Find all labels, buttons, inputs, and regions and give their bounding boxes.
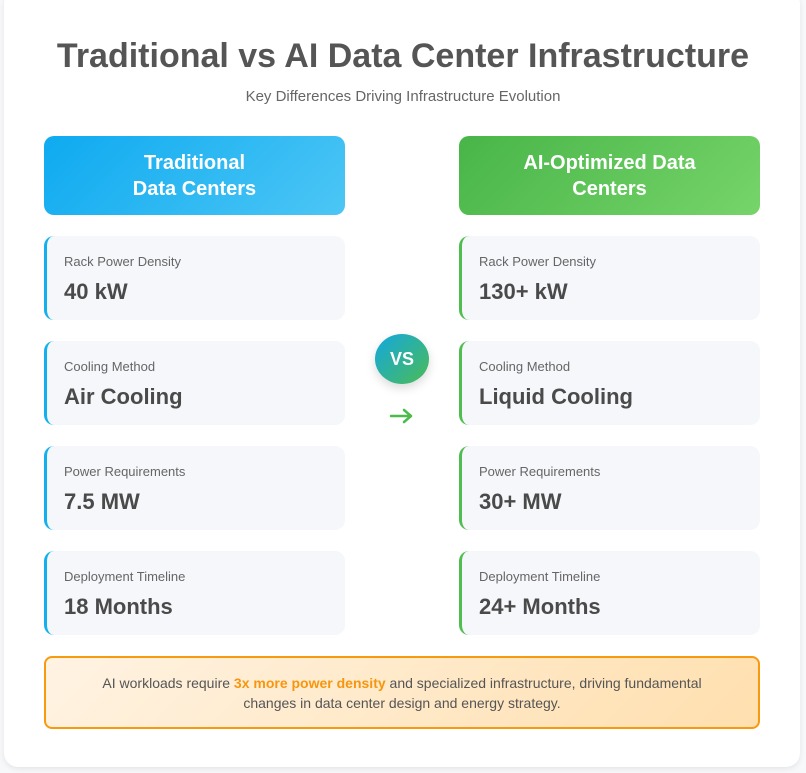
- VS badge: VS: [390, 348, 414, 368]
- metric: traditional cooling: Air Cooling: [64, 384, 183, 409]
- metric: AI cooling: Liquid Cooling: [479, 384, 633, 409]
- header: traditional: Traditional: [144, 152, 245, 174]
- metric: traditional cooling: [44, 341, 345, 425]
- metric: AI cooling: Cooling Method: [479, 359, 570, 374]
- metric: traditional power: Power Requirements: [64, 464, 185, 479]
- metric: traditional cooling: Cooling Method: [64, 359, 155, 374]
- title: Traditional vs AI Data Center Infrastructure: [57, 37, 749, 75]
- header: AI: AI-Optimized Data: [523, 152, 696, 174]
- arrow: [390, 408, 412, 424]
- header: AI: Centers: [572, 178, 647, 200]
- metric: AI timeline: [459, 551, 760, 635]
- metric: traditional power: [44, 446, 345, 530]
- metric: AI rack power: 130+ kW: [479, 279, 568, 304]
- header: AI: [459, 136, 760, 215]
- metric: traditional rack power: 40 kW: [64, 279, 128, 304]
- metric: AI rack power: [459, 236, 760, 320]
- metric: AI timeline: 24+ Months: [479, 594, 601, 619]
- metric: AI power: 30+ MW: [479, 489, 562, 514]
- metric: AI power: [459, 446, 760, 530]
- metric: traditional power: 7.5 MW: [64, 489, 140, 514]
- metric: traditional timeline: [44, 551, 345, 635]
- header: traditional: [44, 136, 345, 215]
- metric: traditional rack power: [44, 236, 345, 320]
- callout: changes in data center design and energy strategy.: [243, 695, 561, 711]
- callout: [44, 656, 760, 729]
- header: traditional: Data Centers: [133, 178, 256, 200]
- callout: AI workloads require 3x more power density and specialized infrastructure, driving fundamental: [102, 675, 702, 691]
- metric: AI cooling: [459, 341, 760, 425]
- metric: AI rack power: Rack Power Density: [479, 254, 596, 269]
- metric: traditional timeline: 18 Months: [64, 594, 173, 619]
- metric: AI power: Power Requirements: [479, 464, 600, 479]
- subtitle: Key Differences Driving Infrastructure Evolution: [246, 88, 560, 105]
- metric: traditional timeline: Deployment Timeline: [64, 569, 185, 584]
- VS badge: [375, 334, 429, 384]
- metric: traditional rack power: Rack Power Density: [64, 254, 181, 269]
- metric: AI timeline: Deployment Timeline: [479, 569, 600, 584]
